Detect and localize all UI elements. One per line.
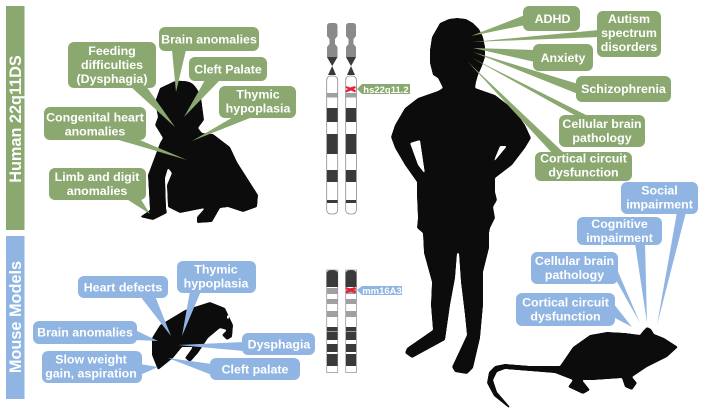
- marker: red deletion: [346, 287, 356, 294]
- callout: Congenital heart anomalies: anomalies: [65, 124, 125, 138]
- callout: Cortical circuit dysfunction (mouse): dysfunction: [530, 310, 601, 324]
- callout: Brain anomalies: Brain anomalies: [161, 32, 257, 46]
- callout: Cleft Palate: Cleft Palate: [194, 62, 262, 76]
- silhouette: mouse pup: [152, 302, 233, 370]
- callout: Anxiety: [473, 44, 593, 71]
- callout: Slow weight gain, aspiration: [42, 351, 158, 383]
- callout: ADHD: ADHD: [535, 12, 570, 26]
- callout: Brain anomalies (mouse): Brain anomalies: [37, 326, 133, 340]
- callout: Cellular brain pathology: pathology: [572, 131, 632, 145]
- callout: Thymic hypoplasia: [192, 86, 296, 141]
- callout: Autism spectrum disorders: disorders: [601, 40, 657, 54]
- callout: Anxiety: Anxiety: [541, 51, 585, 65]
- label: mm16A3: mm16A3: [362, 286, 402, 297]
- callout: Feeding difficulties: difficulties: [81, 58, 143, 72]
- callout: Cleft palate (mouse): Cleft palate: [222, 362, 288, 376]
- callout: Cellular brain pathology (mouse): Cellular brain: [535, 254, 614, 268]
- panel label: Human 22q11DS: Human 22q11DS: [7, 55, 25, 183]
- callout: Limb and digit anomalies: Limb and digit: [55, 170, 139, 184]
- callout: Cellular brain pathology: Cellular brain: [562, 117, 642, 131]
- callout: Limb and digit anomalies: anomalies: [67, 184, 127, 198]
- callout: Cellular brain pathology: [472, 58, 645, 147]
- callout: Brain anomalies (mouse): [33, 321, 158, 344]
- callout: Limb and digit anomalies: [49, 168, 150, 214]
- callout: Cleft Palate: [184, 57, 267, 117]
- callout: Social impairment: impairment: [626, 198, 693, 212]
- callout: Cortical circuit dysfunction: [468, 62, 632, 181]
- chromosome: human right: [346, 23, 356, 214]
- callout: Feeding difficulties: Feeding: [88, 44, 136, 58]
- callout: Cellular brain pathology (mouse): [531, 252, 640, 323]
- callout: ADHD: [471, 6, 580, 36]
- callout: Congenital heart anomalies: [44, 107, 187, 160]
- chromosome: mouse right: [346, 270, 356, 372]
- callout: Cortical circuit dysfunction: Cortical circuit: [540, 152, 627, 166]
- callout: Social impairment: Social: [641, 184, 678, 198]
- callout: Thymic hypoplasia: hypoplasia: [226, 102, 290, 116]
- callout: Slow weight gain, aspiration: gain, aspiration: [45, 366, 137, 380]
- callout: Thymic hypoplasia (mouse): Thymic: [194, 262, 238, 276]
- callout: Schizophrenia: Schizophrenia: [581, 82, 666, 96]
- callout: Social impairment: [621, 182, 698, 325]
- callout: Dysphagia: [178, 333, 315, 355]
- callout: Autism spectrum disorders: [472, 11, 661, 57]
- callout: Brain anomalies: [159, 27, 259, 92]
- callout: Feeding difficulties: (Dysphagia): [77, 72, 147, 86]
- callout: Cognitive impairment: Cognitive: [591, 217, 648, 231]
- callout: Cortical circuit dysfunction (mouse): [516, 293, 632, 327]
- callout: Heart defects: Heart defects: [84, 280, 162, 294]
- callout: Thymic hypoplasia (mouse): hypoplasia: [184, 276, 248, 290]
- callout: Thymic hypoplasia: Thymic: [236, 88, 280, 102]
- callout: Cortical circuit dysfunction (mouse): Cortical circuit: [522, 296, 609, 310]
- callout: Cortical circuit dysfunction: dysfunction: [548, 166, 619, 180]
- marker: red deletion: [346, 86, 356, 92]
- silhouette: adult mouse: [487, 327, 678, 408]
- silhouette: human infant: [140, 81, 258, 223]
- panel label: Mouse Models: Mouse Models: [7, 261, 25, 373]
- callout: Feeding difficulties: [68, 42, 175, 127]
- panel label: Mouse Models: [6, 236, 25, 399]
- callout: Slow weight gain, aspiration: Slow weight: [55, 352, 127, 366]
- chromosome: human left: [327, 23, 338, 214]
- callout: Congenital heart anomalies: Congenital heart: [46, 110, 144, 124]
- callout: Cognitive impairment: [577, 217, 662, 323]
- chromosome: mouse left: [326, 270, 338, 372]
- callout: Dysphagia: Dysphagia: [248, 338, 310, 352]
- silhouette: child: [391, 18, 531, 374]
- callout: Heart defects: [78, 276, 171, 336]
- panel label: Human 22q11DS: [6, 6, 25, 230]
- callout: Cellular brain pathology (mouse): pathology: [545, 268, 604, 282]
- callout: Cleft palate (mouse): [168, 358, 300, 380]
- label: hs22q11.2: hs22q11.2: [363, 85, 409, 96]
- callout: Autism spectrum disorders: spectrum: [601, 26, 657, 40]
- callout: Schizophrenia: [473, 52, 671, 102]
- callout: Autism spectrum disorders: Autism: [608, 12, 650, 26]
- callout: Cognitive impairment: impairment: [586, 231, 653, 245]
- chromosome pair: human: [327, 23, 410, 214]
- chromosome pair: mouse: [326, 270, 402, 372]
- callout: Thymic hypoplasia (mouse): [177, 261, 256, 336]
